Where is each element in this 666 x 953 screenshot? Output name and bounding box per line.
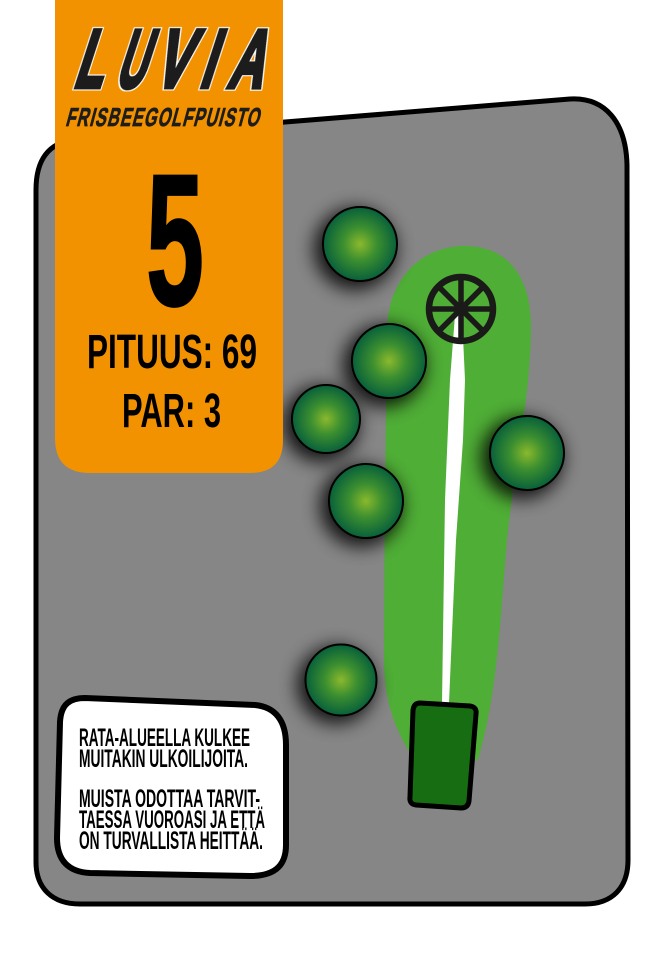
tree 6	[297, 644, 376, 724]
title: A	[221, 13, 285, 105]
note text: MUISTA ODOTTAA TARVIT-	[79, 785, 260, 813]
fairway	[384, 246, 531, 760]
title	[67, 13, 285, 105]
subtitle: FRISBEEGOLFPUISTO	[63, 103, 265, 132]
note text	[79, 724, 265, 855]
note text: TAESSA VUOROASI JA ETTÄ	[79, 806, 265, 834]
trees	[283, 207, 564, 724]
title: U	[109, 13, 167, 105]
panel: safety note	[57, 698, 286, 876]
tree 4	[320, 464, 403, 547]
title: L	[67, 13, 125, 105]
panel: course background	[36, 99, 628, 904]
title: V	[147, 13, 210, 105]
note text: ON TURVALLISTA HEITTÄÄ.	[79, 827, 263, 855]
icon: tee pad	[410, 703, 476, 808]
flight path	[442, 315, 465, 703]
par: PAR: 3	[122, 385, 221, 438]
tree 3	[283, 385, 360, 462]
title: I	[193, 13, 235, 105]
length: PITUUS: 69	[87, 326, 257, 379]
icon: basket	[429, 277, 493, 341]
tree 1	[314, 207, 397, 290]
panel: orange info	[55, 0, 283, 473]
hole number: 5	[146, 135, 204, 345]
note text: MUITAKIN ULKOILIJOITA.	[79, 745, 248, 773]
tree 2	[343, 324, 426, 407]
tree 5	[481, 416, 564, 499]
note text: RATA-ALUEELLA KULKEE	[79, 724, 250, 752]
